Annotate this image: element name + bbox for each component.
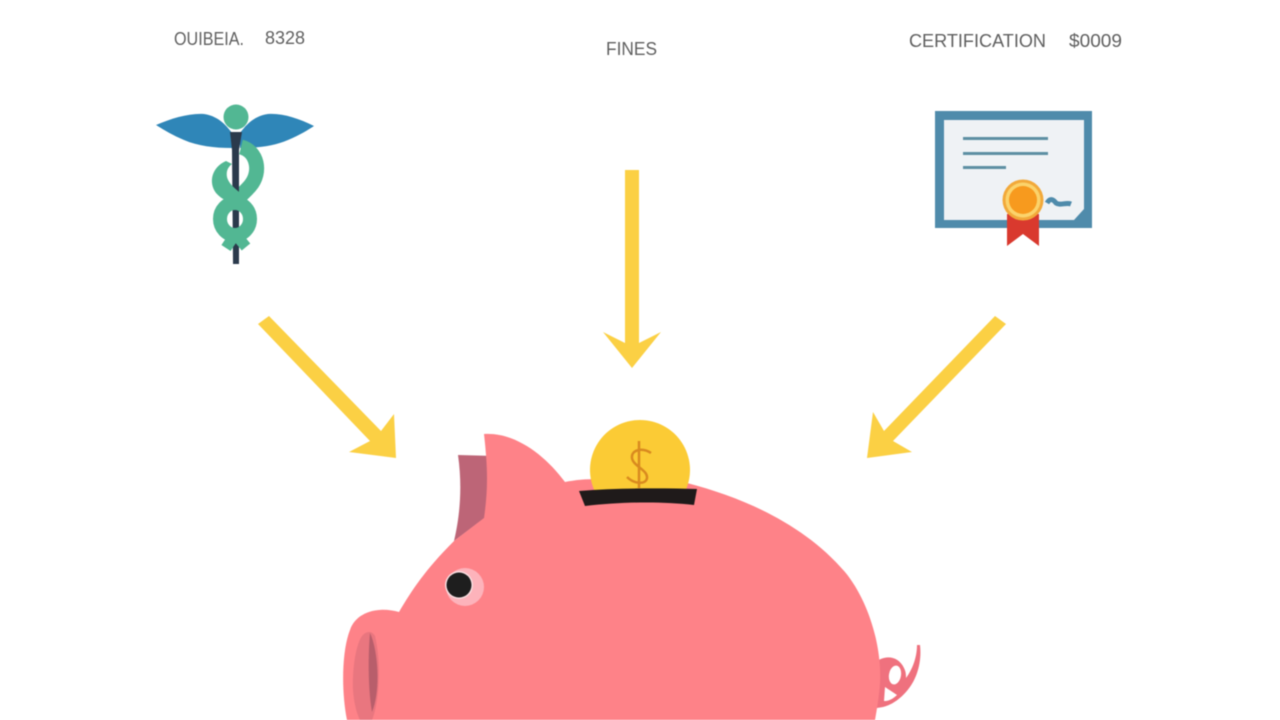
body — [343, 434, 880, 720]
dollar sign — [627, 441, 651, 488]
signature — [1047, 200, 1071, 204]
icon: piggy bank — [343, 420, 920, 720]
arrow: right — [867, 316, 1006, 458]
label: certification cost: $0009 — [1069, 31, 1122, 51]
tail — [874, 645, 920, 708]
label: left cost — [174, 28, 305, 49]
label: left cost: OUIBEIA. — [174, 29, 244, 49]
left wing — [156, 114, 232, 148]
arrow: center — [603, 170, 661, 368]
right wing — [240, 114, 314, 148]
coin — [590, 420, 690, 490]
label: certification cost — [909, 31, 1122, 51]
icon: caduceus — [156, 104, 314, 264]
ear back — [454, 455, 495, 541]
staff — [230, 132, 242, 264]
top ball — [224, 104, 248, 130]
seal — [1002, 180, 1044, 220]
serpent upper coil — [232, 147, 257, 203]
arrow: left — [258, 316, 396, 458]
icon: certificate — [935, 111, 1092, 246]
paper — [944, 120, 1084, 220]
label: center fees: FINES — [606, 39, 657, 59]
label: left cost: 8328 — [265, 28, 305, 48]
label: certification cost: CERTIFICATION — [909, 31, 1046, 51]
frame — [935, 111, 1092, 228]
eye — [445, 568, 484, 606]
text lines — [963, 137, 1048, 169]
ribbon — [1007, 214, 1039, 246]
coin slot — [579, 488, 697, 506]
serpent lower coil — [212, 161, 250, 264]
snout nostril — [353, 632, 379, 720]
